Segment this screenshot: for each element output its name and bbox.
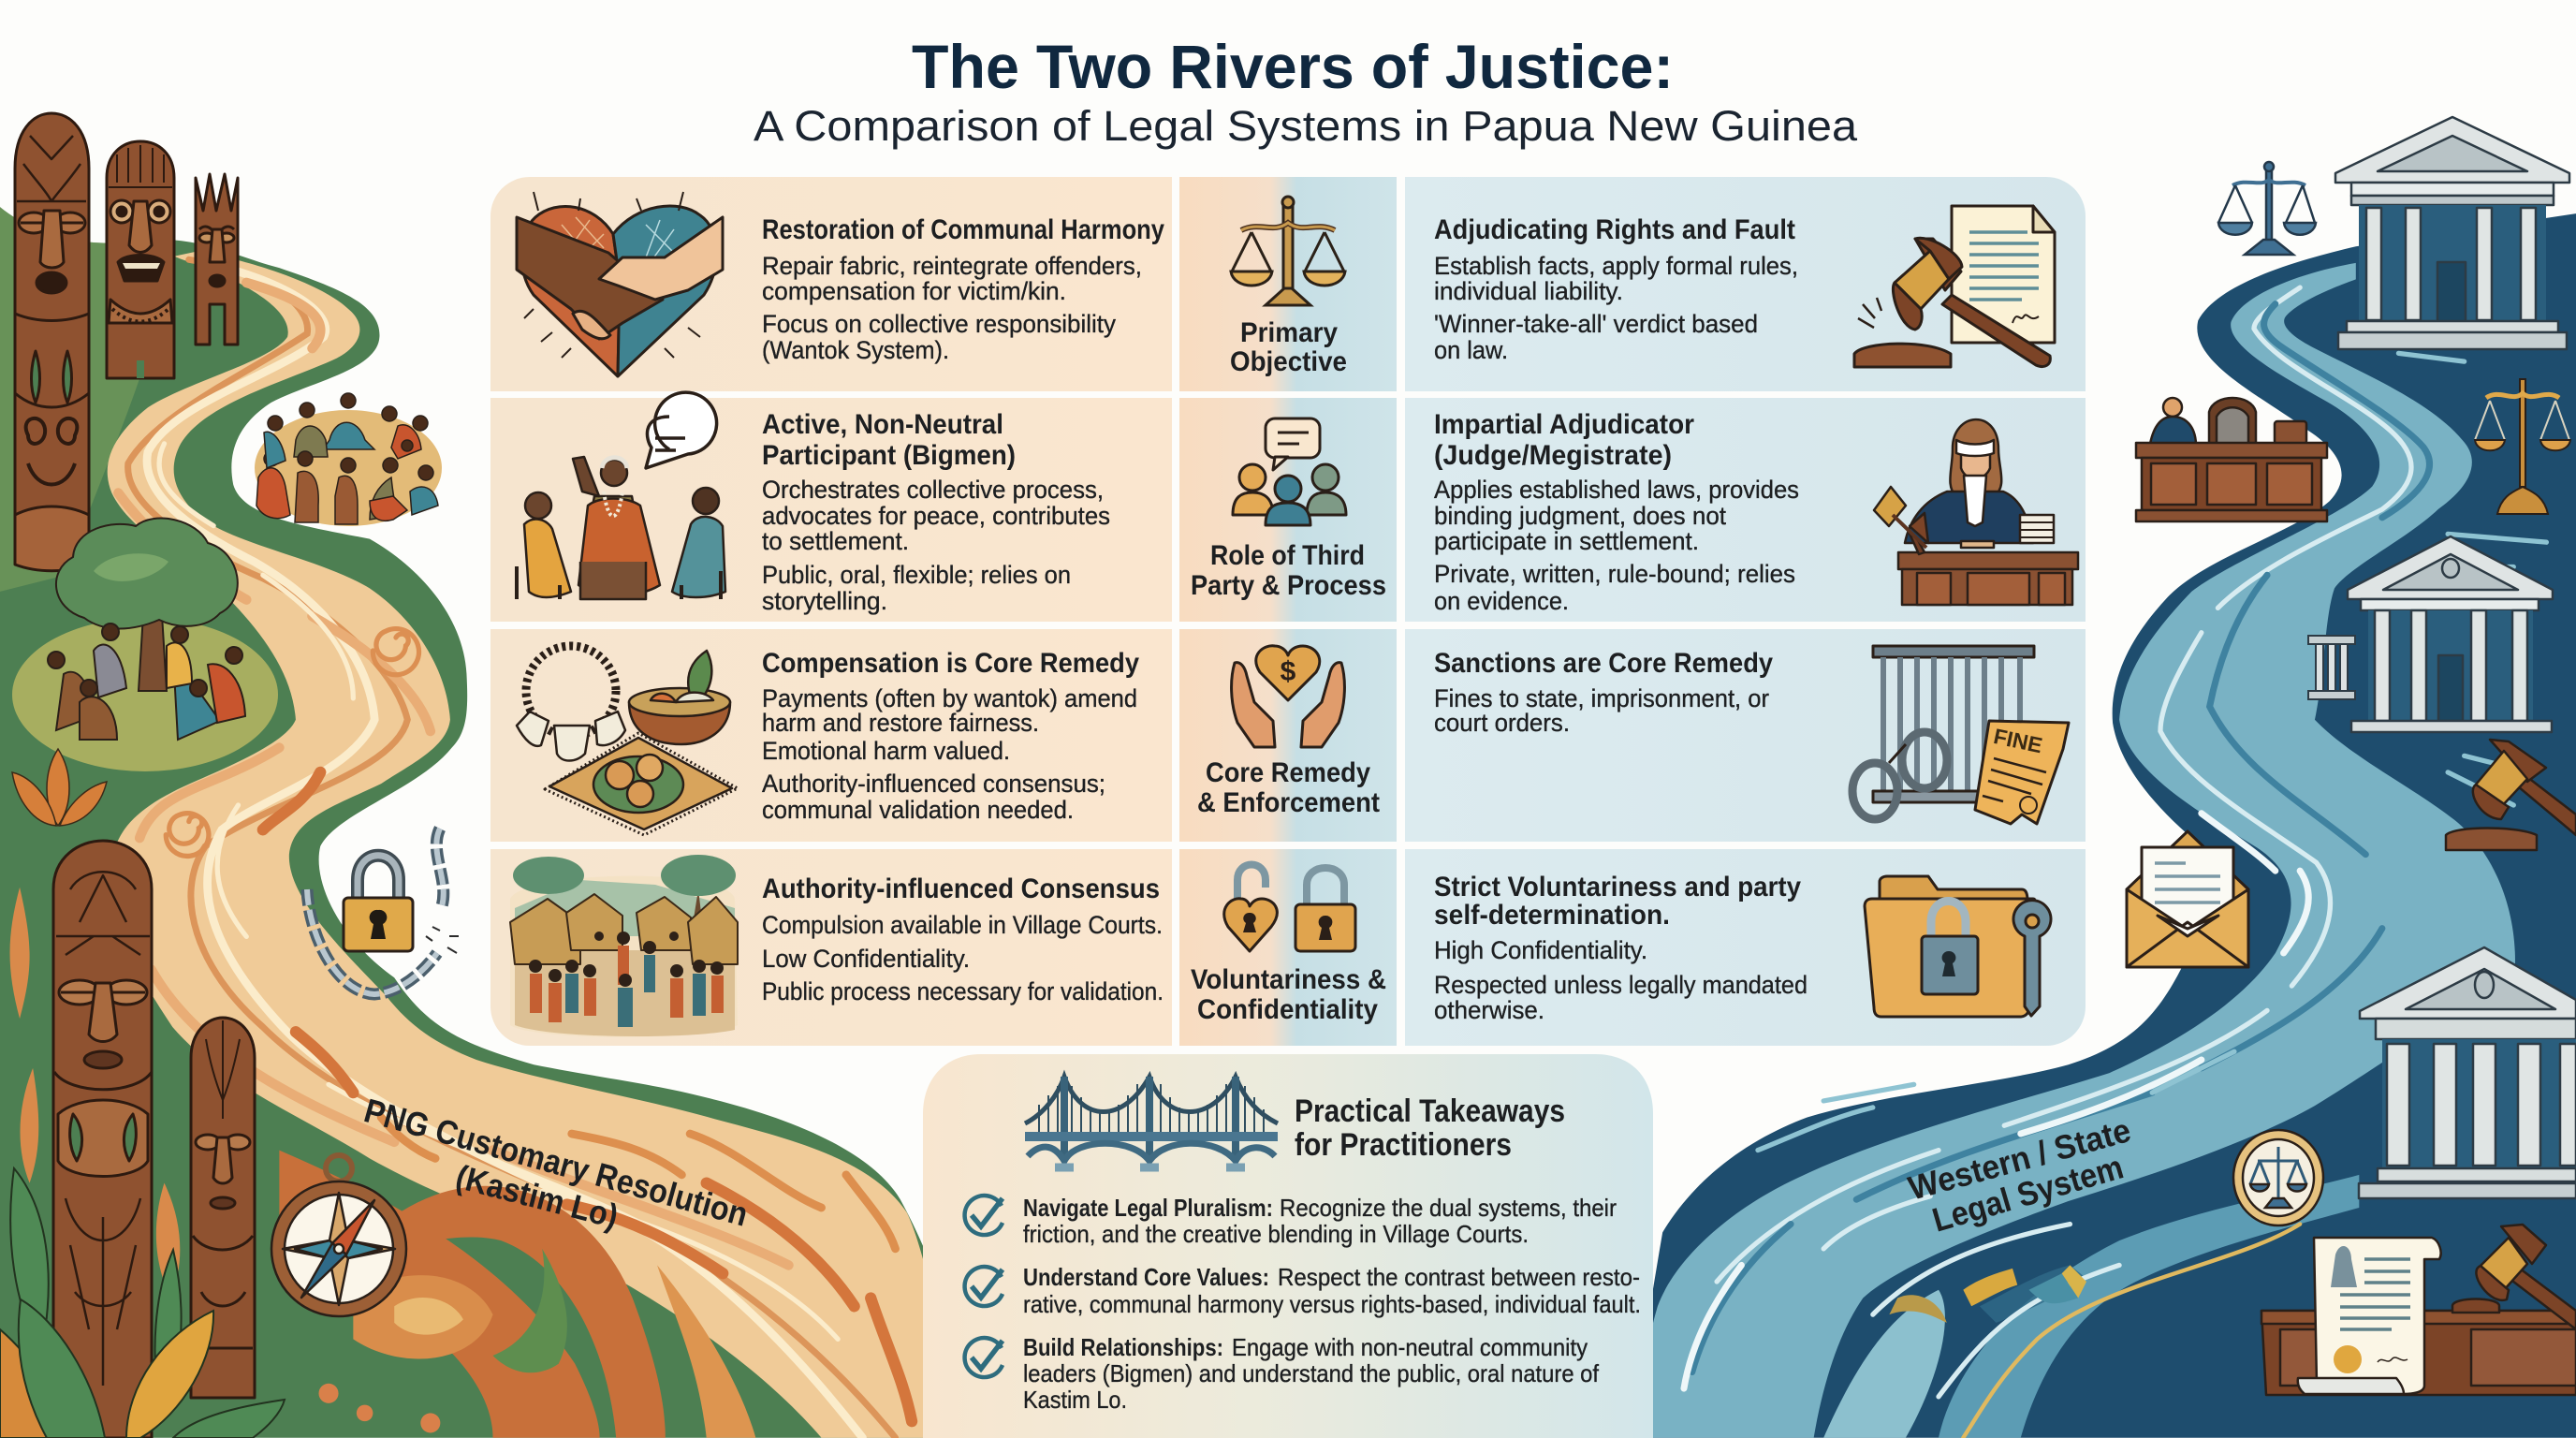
row 2 customary text: active participant: Public, oral, flexible; relies on bbox=[762, 561, 1071, 589]
row 2 customary text: active participant: Participant (Bigmen) bbox=[762, 440, 1016, 471]
takeaway: build relationships: Build Relationships: bbox=[1023, 1333, 1223, 1361]
icon: three people with speech bubble bbox=[1233, 418, 1346, 525]
row 4 customary text: authority-influenced consensus: Authority-influenced Consensus bbox=[762, 873, 1160, 904]
icon: broken chain and padlock bbox=[307, 829, 459, 994]
row 4 western text: strict voluntariness: Strict Voluntariness and party bbox=[1434, 872, 1801, 902]
row 1 western text: adjudicating rights and fault bbox=[1434, 214, 1798, 364]
row 3 label: core remedy and enforcement: Core Remedy bbox=[1206, 757, 1370, 788]
row 1 label: primary objective bbox=[1230, 317, 1347, 377]
takeaways heading: Practical Takeaways bbox=[1295, 1093, 1565, 1129]
icon: shell necklace, food bowl and woven mat bbox=[517, 646, 738, 835]
row 4 label: voluntariness and confidentiality bbox=[1191, 964, 1386, 1025]
icon: desk with certificate and gavel bbox=[2261, 1225, 2576, 1395]
row 1 western text: adjudicating rights and fault: on law. bbox=[1434, 336, 1508, 364]
row 3 label: core remedy and enforcement bbox=[1197, 757, 1380, 818]
icon: gavel and signed document bbox=[1854, 206, 2055, 367]
row 4 customary text: authority-influenced consensus bbox=[762, 873, 1164, 1005]
icon: blue scales bbox=[2218, 162, 2316, 255]
row 4 western text: strict voluntariness: Respected unless legally mandated bbox=[1434, 971, 1808, 999]
row 4 customary text: authority-influenced consensus: Public process necessary for validation. bbox=[762, 977, 1164, 1005]
icon: gavel on the right edge bbox=[2446, 740, 2576, 850]
row 3 customary text: compensation: Compensation is Core Remedy bbox=[762, 648, 1139, 679]
river label: Western / State legal system: Legal System bbox=[1928, 1147, 2128, 1240]
takeaway: understand core values bbox=[965, 1263, 1641, 1318]
row 1 customary text: restoration of communal harmony: (Wantok System). bbox=[762, 336, 949, 364]
subtitle: A Comparison of Legal Systems in Papua New Guinea bbox=[754, 102, 1858, 150]
row 2 label: role of third party and process bbox=[1191, 540, 1386, 601]
row 2 western text: impartial adjudicator: Private, written, rule-bound; relies bbox=[1434, 560, 1795, 588]
river streaks bbox=[1717, 287, 2411, 1282]
icon: orange leaf sprig bbox=[12, 749, 107, 826]
panel: comparison table bbox=[490, 177, 2086, 1438]
icon: compass bbox=[271, 1155, 406, 1316]
takeaway: navigate legal pluralism: Navigate Legal Pluralism: bbox=[1023, 1194, 1273, 1222]
green land bbox=[0, 207, 986, 1438]
icon: jail bars, handcuffs and fine ticket: FINE bbox=[1992, 724, 2044, 757]
row 4 label: voluntariness and confidentiality: Confidentiality bbox=[1197, 994, 1378, 1025]
icon: seal medallion with scales bbox=[2233, 1130, 2323, 1225]
icon: blindfolded judge at bench bbox=[1874, 419, 2078, 605]
takeaways heading bbox=[1295, 1093, 1565, 1163]
icon: small column block bbox=[2308, 636, 2355, 699]
row 4 customary text: authority-influenced consensus: Compulsion available in Village Courts. bbox=[762, 911, 1163, 939]
icon: courthouse lower right bbox=[2359, 947, 2576, 1198]
row 3 western text: sanctions: court orders. bbox=[1434, 709, 1570, 737]
river label: Western / State legal system: Western / State bbox=[1904, 1110, 2135, 1208]
takeaway: navigate legal pluralism bbox=[965, 1194, 1617, 1248]
row 3 customary text: compensation: harm and restore fairness. bbox=[762, 709, 1039, 737]
row 1 customary text: restoration of communal harmony: Restoration of Communal Harmony bbox=[762, 214, 1164, 245]
icon: carved totem with open mouth bbox=[107, 141, 174, 378]
icon: tree and gathering beneath it bbox=[12, 519, 278, 771]
row 3 western text: sanctions: Sanctions are Core Remedy bbox=[1434, 648, 1773, 679]
icon: elders in dialogue bbox=[517, 392, 725, 599]
icon: locked folder with key bbox=[1865, 876, 2051, 1017]
row 2 western text: impartial adjudicator bbox=[1434, 409, 1799, 615]
icon: carved totem tall bbox=[15, 113, 89, 571]
row 2 western text: impartial adjudicator: Applies established laws, provides bbox=[1434, 476, 1799, 504]
row 1 western text: adjudicating rights and fault: Establish facts, apply formal rules, bbox=[1434, 252, 1798, 280]
row 2 label: role of third party and process: Role of Third bbox=[1210, 540, 1365, 571]
row 2 customary text: active participant: to settlement. bbox=[762, 527, 909, 555]
row 1 customary text: restoration of communal harmony: compensation for victim/kin. bbox=[762, 277, 1066, 305]
row 3 customary text: compensation: Payments (often by wantok) amend bbox=[762, 684, 1137, 712]
row 2 western text: impartial adjudicator: binding judgment, does not bbox=[1434, 502, 1726, 530]
river label: PNG customary resolution: PNG Customary Resolution bbox=[360, 1091, 752, 1234]
row 2 western text: impartial adjudicator: on evidence. bbox=[1434, 587, 1569, 615]
row 1 western text: adjudicating rights and fault: 'Winner-take-all' verdict based bbox=[1434, 310, 1758, 338]
light blue river bbox=[1627, 263, 2515, 1438]
row 4 label: voluntariness and confidentiality: Voluntariness & bbox=[1191, 964, 1386, 995]
icon: lower small totem bbox=[191, 1018, 255, 1398]
row 1 western text: adjudicating rights and fault: Adjudicating Rights and Fault bbox=[1434, 214, 1795, 245]
title: The Two Rivers of Justice: bbox=[912, 32, 1674, 101]
row 1 customary text: restoration of communal harmony: Repair fabric, reintegrate offenders, bbox=[762, 252, 1142, 280]
icon: open hands holding heart with dollar bbox=[1232, 646, 1344, 747]
row 3 label: core remedy and enforcement: & Enforcement bbox=[1197, 787, 1380, 818]
icon: jail bars, handcuffs and fine ticket bbox=[1852, 646, 2069, 824]
row 4 western text: strict voluntariness: otherwise. bbox=[1434, 996, 1544, 1024]
row 4 western text: strict voluntariness: High Confidentiality. bbox=[1434, 936, 1647, 964]
row 2 customary text: active participant: advocates for peace, contributes bbox=[762, 502, 1110, 530]
takeaway: build relationships: Engage with non-neutral community bbox=[1232, 1333, 1588, 1361]
takeaway: understand core values: rative, communal harmony versus rights-based, individual fault. bbox=[1023, 1290, 1641, 1318]
icon: small crowned totem bbox=[196, 174, 238, 345]
river label: PNG customary resolution: (Kastim Lo) bbox=[452, 1157, 622, 1236]
takeaway: navigate legal pluralism: friction, and the creative blending in Village Courts. bbox=[1023, 1220, 1529, 1248]
sand river bbox=[108, 252, 970, 1438]
row 3 customary text: compensation: communal validation needed. bbox=[762, 796, 1074, 824]
icon: scales of justice, primary objective bbox=[1231, 197, 1345, 305]
icon: suspension bridge bbox=[1025, 1077, 1278, 1167]
row 1 western text: adjudicating rights and fault: individual liability. bbox=[1434, 277, 1623, 305]
icon: open heart padlock and closed padlock bbox=[1224, 865, 1355, 951]
icon: open hands holding heart with dollar: $ bbox=[1281, 656, 1296, 687]
row 2 customary text: active participant bbox=[762, 409, 1110, 615]
icon: heart handshake bbox=[517, 192, 723, 376]
row 1 customary text: restoration of communal harmony: Focus on collective responsibility bbox=[762, 310, 1116, 338]
bottom tribal pattern bbox=[10, 888, 896, 1438]
row 3 customary text: compensation: Authority-influenced consensus; bbox=[762, 770, 1105, 798]
row 2 customary text: active participant: Orchestrates collective process, bbox=[762, 476, 1104, 504]
row 2 western text: impartial adjudicator: (Judge/Megistrate) bbox=[1434, 440, 1672, 471]
row 1 customary text: restoration of communal harmony bbox=[762, 214, 1164, 364]
panel: practical takeaways bbox=[923, 1054, 1653, 1438]
takeaway: build relationships bbox=[965, 1333, 1600, 1414]
takeaway: build relationships: Kastim Lo. bbox=[1023, 1386, 1127, 1414]
row 2 western text: impartial adjudicator: Impartial Adjudicator bbox=[1434, 409, 1694, 440]
row 4 western text: strict voluntariness bbox=[1434, 872, 1808, 1024]
icon: village gathering bbox=[510, 855, 738, 1037]
icon: gold scales on dark river bbox=[2475, 379, 2570, 514]
row 3 western text: sanctions bbox=[1434, 648, 1773, 737]
icon: courthouse middle bbox=[2348, 536, 2553, 732]
icon: courthouse top right bbox=[2335, 117, 2569, 349]
icon: broad leaves bottom-left bbox=[0, 1168, 285, 1438]
takeaway: build relationships: leaders (Bigmen) and understand the public, oral nature of bbox=[1023, 1359, 1600, 1387]
row 3 western text: sanctions: Fines to state, imprisonment, or bbox=[1434, 684, 1769, 712]
row 1 label: primary objective: Objective bbox=[1230, 346, 1347, 377]
lower river branch bbox=[1939, 1175, 2359, 1438]
row 4 western text: strict voluntariness: self-determination. bbox=[1434, 900, 1670, 931]
row 3 customary text: compensation bbox=[762, 648, 1139, 824]
row 2 label: role of third party and process: Party & Process bbox=[1191, 570, 1386, 601]
row 2 customary text: active participant: Active, Non-Neutral bbox=[762, 409, 1003, 440]
row 1 label: primary objective: Primary bbox=[1240, 317, 1338, 348]
river label: Western / State legal system bbox=[1904, 1110, 2135, 1240]
row 4 customary text: authority-influenced consensus: Low Confidentiality. bbox=[762, 945, 970, 973]
row 2 customary text: active participant: storytelling. bbox=[762, 587, 887, 615]
right river: Western / State legal system bbox=[1618, 213, 2576, 1438]
icon: envelope with letter bbox=[2127, 831, 2248, 967]
row 3 customary text: compensation: Emotional harm valued. bbox=[762, 737, 1010, 765]
left river: PNG customary resolution bbox=[0, 207, 986, 1438]
takeaway: understand core values: Understand Core Values: bbox=[1023, 1263, 1269, 1291]
icon: village circle meeting on a clearing bbox=[255, 393, 442, 526]
debris in the water bbox=[1963, 1269, 2017, 1306]
icon: lower tall totem bbox=[53, 841, 152, 1438]
icon: judge bench with seated judge bbox=[2136, 398, 2327, 521]
row 2 western text: impartial adjudicator: participate in settlement. bbox=[1434, 527, 1699, 555]
dark blue land bbox=[1618, 213, 2576, 1438]
takeaway: understand core values: Respect the contrast between resto- bbox=[1278, 1263, 1640, 1291]
takeaway: navigate legal pluralism: Recognize the dual systems, their bbox=[1280, 1194, 1617, 1222]
takeaways heading: for Practitioners bbox=[1295, 1127, 1512, 1163]
